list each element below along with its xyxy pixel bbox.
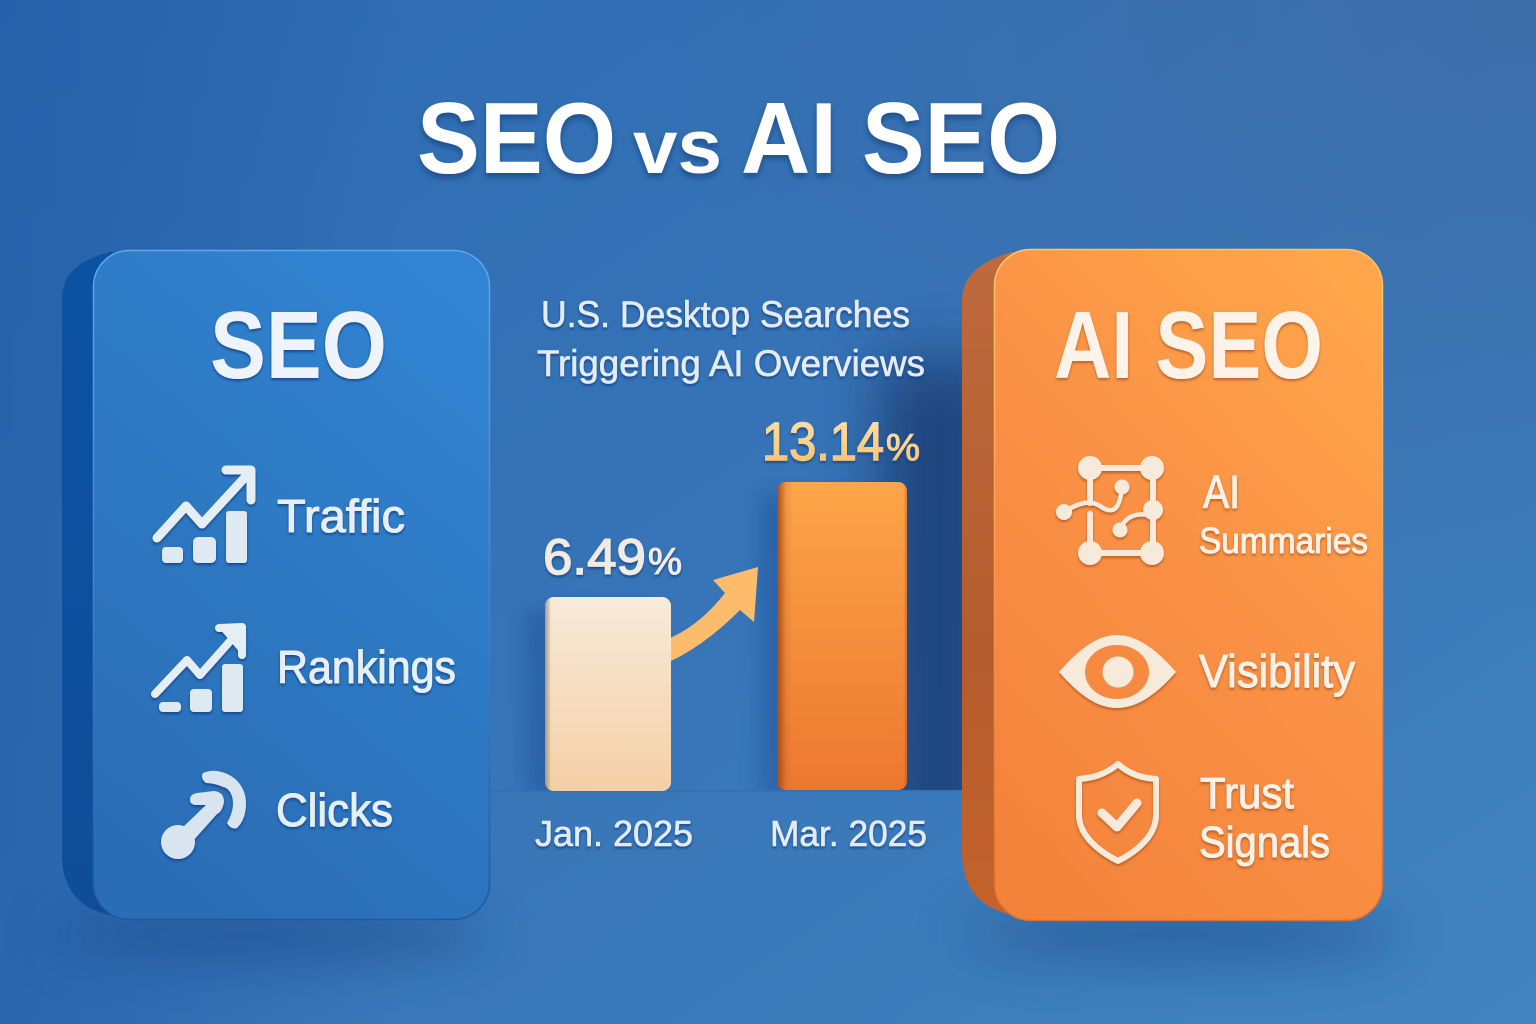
label: AI Summaries — [1199, 466, 1368, 561]
icon: rankings — [155, 627, 243, 712]
bar: Mar. 2025 — [777, 482, 907, 790]
icon: AI summaries — [1056, 456, 1164, 565]
title — [417, 83, 1060, 195]
panel side — [962, 252, 1100, 918]
chart title — [537, 294, 925, 384]
panel heading: AI SEO — [1054, 292, 1323, 399]
chart title: U.S. Desktop Searches — [541, 294, 910, 335]
value: 13.14%: % — [886, 427, 920, 469]
label: Traffic: Traffic — [277, 490, 405, 542]
panel face — [994, 250, 1382, 920]
label: AI Summaries: Summaries — [1199, 520, 1368, 561]
value: 13.14%: 13.14 — [762, 412, 884, 472]
label: Trust Signals — [1199, 769, 1330, 867]
axis label: Mar. 2025: Mar. 2025 — [770, 813, 927, 854]
icon: shield — [1079, 764, 1156, 861]
title: SEO — [417, 83, 616, 195]
label: Trust Signals: Signals — [1199, 818, 1330, 867]
label: Clicks: Clicks — [276, 784, 393, 836]
value: 6.49%: % — [648, 541, 682, 583]
value: 6.49%: 6.49 — [543, 529, 646, 585]
panel: SEO — [62, 250, 490, 920]
title: vs — [633, 105, 722, 190]
chart title: Triggering AI Overviews — [537, 343, 925, 384]
title: SEO — [862, 83, 1060, 195]
axis label: Jan. 2025: Jan. 2025 — [535, 813, 693, 854]
title: AI — [741, 83, 837, 195]
icon: traffic — [157, 470, 251, 563]
icon: clicks — [161, 771, 246, 859]
panel face — [94, 250, 490, 920]
label: Trust Signals: Trust — [1200, 769, 1294, 818]
label: Rankings: Rankings — [277, 641, 456, 693]
label: Visibility: Visibility — [1199, 645, 1355, 697]
icon: eye — [1059, 635, 1176, 708]
chart: AI Overviews searches — [535, 294, 927, 854]
arrow — [670, 567, 758, 661]
panel side — [62, 252, 200, 918]
panel: AI SEO — [962, 250, 1382, 920]
bar: Jan. 2025 — [545, 597, 671, 791]
label: AI Summaries: AI — [1203, 466, 1240, 518]
panel heading: SEO — [210, 292, 387, 399]
